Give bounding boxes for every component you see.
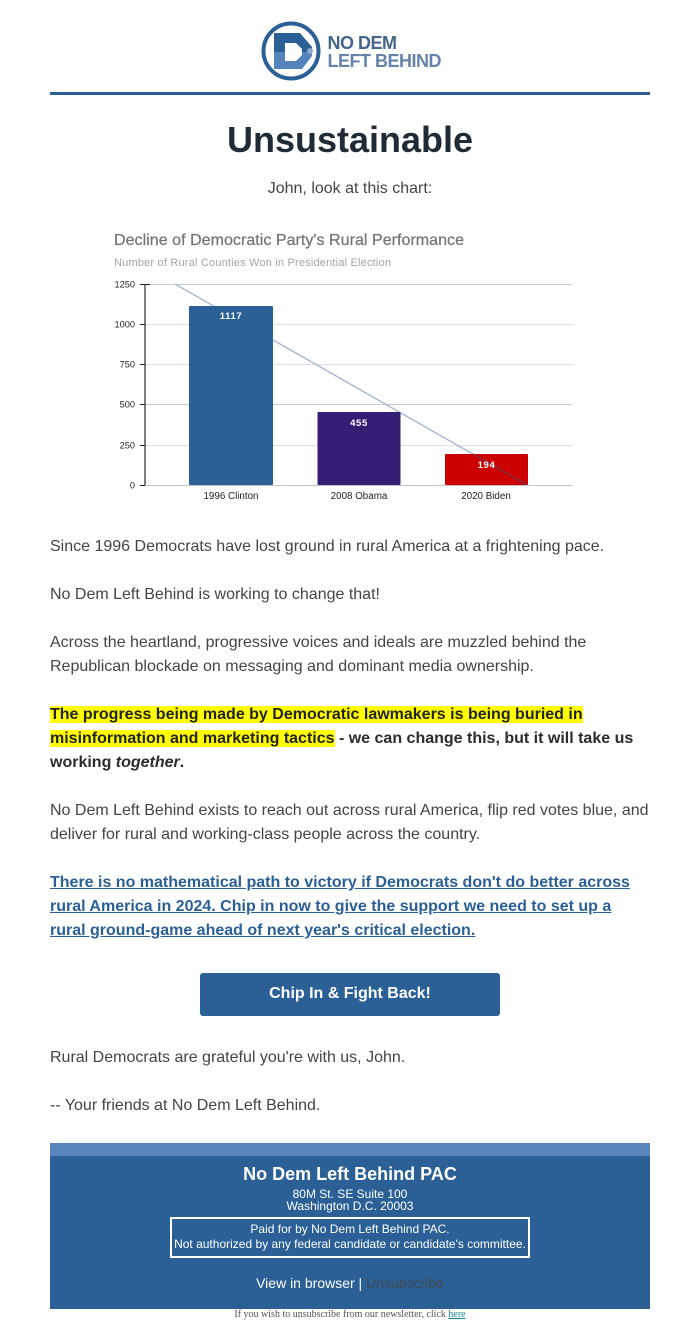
bar: 2020 Biden [445, 454, 528, 485]
footer address: Washington D.C. 20003 [287, 1199, 413, 1213]
y axis: 250 [120, 440, 135, 450]
footer top band [50, 1143, 650, 1156]
y axis: 750 [120, 360, 135, 370]
logo emblem [264, 24, 318, 78]
bar: 1996 Clinton: 1117 [220, 311, 242, 322]
y axis: 1000 [115, 320, 135, 330]
bar: 2008 Obama: 455 [350, 418, 368, 429]
logo wordmark: NO DEM [328, 33, 396, 53]
highlighted bold paragraph [50, 706, 633, 771]
x axis: 1996 Clinton [203, 491, 259, 502]
highlighted bold paragraph: The progress being made by Democratic lawmakers is being buried in [50, 706, 583, 723]
sign-off: -- Your friends at No Dem Left Behind. [50, 1097, 320, 1114]
title: Unsustainable [227, 119, 473, 160]
disclaimer box: Not authorized by any federal candidate or candidate's committee. [174, 1237, 526, 1251]
header rule [50, 92, 650, 95]
donate button [200, 973, 500, 1016]
footer organization name: No Dem Left Behind PAC [243, 1164, 457, 1184]
paragraph: working to change: No Dem Left Behind is working to change that! [50, 586, 380, 603]
logo wordmark [328, 33, 441, 71]
logo [262, 22, 441, 80]
call to action link text: There is no mathematical path to victory if Democrats don't do better across [50, 874, 630, 891]
chart title: Decline of Democratic Party's Rural Performance [114, 232, 464, 249]
footer links: View in browser | Unsubscribe [256, 1275, 444, 1291]
closing thanks: Rural Democrats are grateful you're with us, John. [50, 1049, 405, 1066]
trend line [175, 284, 527, 485]
y axis: 500 [120, 400, 135, 410]
x axis: 2020 Biden [461, 491, 511, 502]
bar: 2008 Obama [318, 412, 400, 485]
y axis: 1250 [115, 280, 135, 290]
paragraph: mission: No Dem Left Behind exists to reach out across rural America, flip red votes blue, and [50, 802, 649, 819]
footer panel [50, 1143, 650, 1309]
bar chart [114, 232, 572, 502]
intro line: John, look at this chart: [268, 180, 432, 197]
x axis: 2008 Obama [331, 491, 388, 502]
footer address: 80M St. SE Suite 100 [293, 1187, 407, 1201]
footer address [286, 1187, 413, 1213]
disclaimer box [170, 1217, 530, 1258]
disclaimer box: Paid for by No Dem Left Behind PAC. [250, 1222, 450, 1236]
chart subtitle: Number of Rural Counties Won in Presidential Election [114, 257, 391, 269]
y axis: 0 [130, 480, 135, 490]
logo wordmark: LEFT BEHIND [328, 51, 441, 71]
highlighted bold paragraph: working together. [50, 754, 184, 771]
paragraph: heartland: Across the heartland, progressive voices and ideals are muzzled behind the [50, 634, 586, 651]
paragraph: mission: deliver for rural and working-class people across the country. [50, 826, 480, 843]
call to action link text: rural ground-game ahead of next year's critical election. [50, 922, 475, 939]
paragraph: heartland: Republican blockade on messaging and dominant media ownership. [50, 658, 534, 675]
bar: 2020 Biden: 194 [478, 460, 495, 471]
x axis [145, 486, 572, 502]
paragraph: heartland [50, 634, 586, 675]
highlighted bold paragraph: misinformation and marketing tactics - we can change this, but it will take us [50, 730, 633, 747]
unsubscribe note: If you wish to unsubscribe from our newsletter, click here [234, 1309, 466, 1320]
call to action link text: rural America in 2024. Chip in now to give the support we need to set up a [50, 898, 611, 915]
call to action link text [50, 874, 630, 939]
paragraph: lost ground: Since 1996 Democrats have lost ground in rural America at a frightening pace. [50, 538, 604, 555]
donate button: Chip In & Fight Back! [269, 985, 431, 1002]
y axis [115, 280, 150, 490]
paragraph: mission [50, 802, 649, 843]
bar: 1996 Clinton [189, 306, 273, 485]
